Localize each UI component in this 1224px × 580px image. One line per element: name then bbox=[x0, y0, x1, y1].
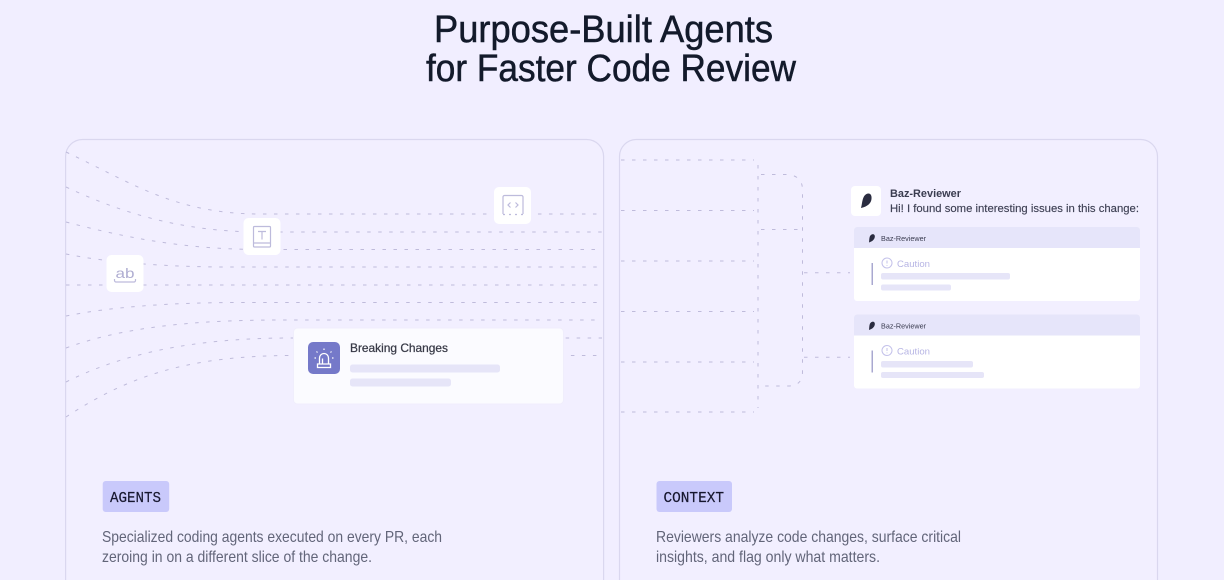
text: context description: insights, and flag only what matters. bbox=[656, 549, 880, 566]
card: breaking changes bbox=[294, 328, 564, 404]
title: for Faster Code Review bbox=[426, 48, 797, 90]
panel: agents bbox=[66, 140, 604, 580]
comment card 1: Caution bbox=[897, 259, 930, 270]
text: agents description: zeroing in on a different slice of the change. bbox=[102, 549, 372, 566]
icon: book T bbox=[244, 218, 280, 255]
icon: code bbox=[494, 187, 531, 224]
comment card 1: Baz-Reviewer bbox=[881, 234, 926, 243]
comment card 2 bbox=[854, 314, 1140, 388]
card: breaking changes: Breaking Changes bbox=[350, 341, 448, 355]
reviewer header: Baz-Reviewer bbox=[890, 188, 962, 200]
badge: context bbox=[656, 481, 732, 512]
icon: alarm bbox=[308, 342, 340, 374]
title: Purpose-Built Agents bbox=[434, 9, 773, 51]
reviewer header bbox=[851, 186, 1139, 216]
reviewer header: Hi! I found some interesting issues in this change: bbox=[890, 203, 1139, 215]
dashed agent lines bbox=[66, 152, 602, 417]
text: context description: Reviewers analyze code changes, surface critical bbox=[656, 529, 961, 546]
icon: ab: ab bbox=[116, 265, 135, 281]
text: context description bbox=[656, 529, 961, 566]
text: agents description bbox=[102, 529, 442, 566]
badge: agents bbox=[103, 481, 169, 512]
comment card 2: Caution bbox=[897, 346, 930, 358]
comment card 1 bbox=[854, 227, 1140, 301]
dashed context connectors bbox=[621, 160, 850, 412]
icon: ab bbox=[106, 255, 144, 292]
panel: context bbox=[620, 140, 1158, 580]
title bbox=[426, 9, 797, 90]
comment card 2: Baz-Reviewer bbox=[881, 322, 926, 330]
text: agents description: Specialized coding agents executed on every PR, each bbox=[102, 529, 442, 546]
badge: agents: AGENTS bbox=[110, 490, 161, 507]
badge: context: CONTEXT bbox=[664, 490, 724, 507]
icon: reviewer bird bbox=[851, 186, 881, 216]
